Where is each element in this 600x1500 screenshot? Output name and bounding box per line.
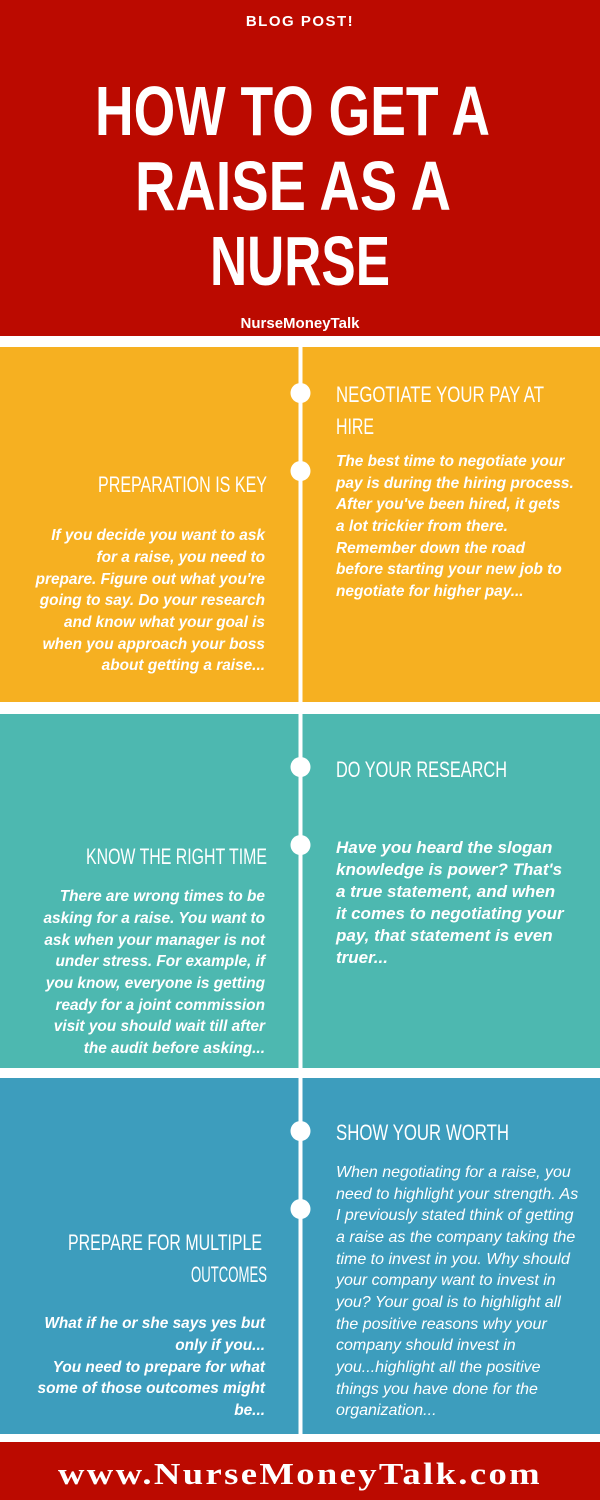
text: research: knowledge is power? That's	[336, 860, 562, 879]
text: right time: you know, everyone is getting	[45, 975, 266, 992]
timeline line	[290, 347, 310, 1434]
text: negotiate: pay is during the hiring process.	[335, 475, 574, 492]
heading: right time: KNOW THE RIGHT TIME	[86, 844, 267, 869]
text: outcomes: only if you...	[175, 1337, 265, 1354]
text: outcomes: some of those outcomes might	[38, 1380, 266, 1397]
text: worth: you? Your goal is to highlight all	[335, 1294, 561, 1311]
text: preparation: when you approach your boss	[43, 636, 265, 653]
heading: negotiate	[336, 382, 544, 439]
text: research: Have you heard the slogan	[336, 838, 552, 857]
text: outcomes: You need to prepare for what	[53, 1359, 266, 1376]
text: right time: visit you should wait till after	[54, 1018, 266, 1035]
text: outcomes: What if he or she says yes but	[44, 1315, 266, 1332]
text: negotiate: After you've been hired, it gets	[335, 496, 561, 513]
text: worth	[335, 1164, 578, 1419]
text: negotiate: a lot trickier from there.	[336, 518, 508, 535]
footer url: www.NurseMoneyTalk.com	[58, 1456, 542, 1491]
text: worth: a raise as the company taking the	[336, 1229, 575, 1246]
text: negotiate	[335, 453, 574, 600]
text: preparation: about getting a raise...	[102, 657, 265, 674]
text: preparation: If you decide you want to ask	[51, 527, 266, 544]
panel: blue	[0, 1078, 600, 1434]
text: worth: organization...	[336, 1402, 437, 1419]
text: research: pay, that statement is even	[335, 926, 553, 945]
brand name: NurseMoneyTalk	[241, 315, 360, 332]
text: preparation	[35, 527, 266, 674]
text: negotiate: Remember down the road	[336, 540, 526, 557]
text: right time: ready for a joint commission	[55, 997, 265, 1014]
panel: yellow	[0, 347, 600, 702]
heading: worth: SHOW YOUR WORTH	[336, 1120, 509, 1145]
title: NURSE	[210, 222, 390, 300]
heading: outcomes: OUTCOMES	[191, 1262, 267, 1287]
text: right time: There are wrong times to be	[60, 888, 265, 905]
heading: outcomes: PREPARE FOR MULTIPLE	[68, 1230, 262, 1255]
heading: negotiate: HIRE	[336, 414, 374, 439]
text: preparation: and know what your goal is	[64, 614, 265, 631]
text: research: a true statement, and when	[336, 882, 555, 901]
text: preparation: going to say. Do your research	[39, 592, 265, 609]
text: negotiate: before starting your new job to	[336, 561, 562, 578]
text: right time: under stress. For example, if	[55, 953, 267, 970]
text: preparation: prepare. Figure out what you're	[35, 571, 265, 588]
text: preparation: for a raise, you need to	[96, 549, 265, 566]
text: worth: time to invest in you. Why should	[336, 1251, 571, 1268]
heading: preparation: PREPARATION IS KEY	[98, 472, 267, 497]
text: right time: asking for a raise. You want to	[43, 910, 265, 927]
timeline dots	[290, 383, 310, 1219]
text: worth: things you have done for the	[336, 1381, 538, 1398]
text: research	[335, 838, 565, 967]
text: negotiate: The best time to negotiate your	[336, 453, 565, 470]
text: worth: the positive reasons why your	[336, 1316, 547, 1333]
text: right time: ask when your manager is not	[44, 932, 266, 949]
text: worth: you...highlight all the positive	[335, 1359, 541, 1376]
text: worth: I previously stated think of getting	[336, 1207, 574, 1224]
text: worth: your company want to invest in	[335, 1272, 556, 1289]
kicker: blog post: BLOG POST!	[246, 13, 354, 30]
footer	[0, 1442, 600, 1500]
title: RAISE AS A	[135, 147, 451, 225]
text: outcomes: be...	[234, 1402, 265, 1419]
title	[95, 72, 490, 300]
panel: teal	[0, 714, 600, 1068]
title: HOW TO GET A	[95, 72, 490, 150]
text: worth: When negotiating for a raise, you	[336, 1164, 571, 1181]
text: outcomes	[38, 1315, 266, 1419]
text: negotiate: negotiate for higher pay...	[336, 583, 524, 600]
text: worth: need to highlight your strength. As	[336, 1186, 578, 1203]
text: right time: the audit before asking...	[84, 1040, 265, 1057]
text: right time	[43, 888, 267, 1057]
heading: research: DO YOUR RESEARCH	[336, 757, 507, 782]
heading: outcomes	[68, 1230, 267, 1287]
text: research: truer...	[336, 948, 388, 967]
text: research: it comes to negotiating your	[336, 904, 565, 923]
text: worth: company should invest in	[336, 1337, 516, 1354]
header banner	[0, 0, 600, 336]
